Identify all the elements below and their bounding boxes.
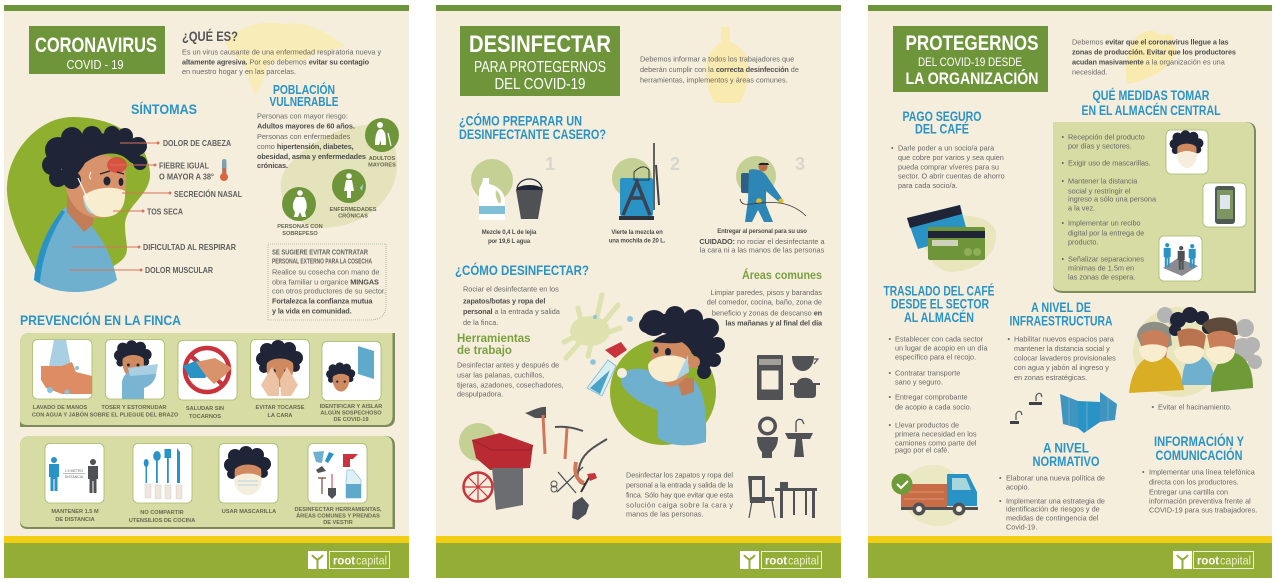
card: disinfect tools xyxy=(308,444,367,503)
label: enfermedades crónicas: CRÓNICAS xyxy=(338,212,368,220)
text: traslado list: pago por el café. xyxy=(895,446,949,454)
callout: harvest recommendation: MINGAS xyxy=(350,278,379,286)
heading: cómo desinfectar: ¿CÓMO DESINFECTAR? xyxy=(455,261,589,278)
icons: bathroom xyxy=(757,416,813,458)
illustration: tools xyxy=(459,407,607,520)
panel: desinfectar xyxy=(436,5,841,578)
heading: población vulnerable: POBLACIÓN xyxy=(273,82,335,97)
text: áreas comunes: las mañanas y al final del día xyxy=(725,318,823,328)
caption 3: Entregar al personal para su uso xyxy=(717,229,807,235)
caption 1: por 19,6 L agua xyxy=(488,239,531,245)
text: population at risk: hipertensión, diabetes, xyxy=(277,142,354,151)
heading: normativo: A NIVEL xyxy=(1043,440,1089,456)
heading line 2: DESDE EL SECTOR xyxy=(891,296,989,312)
logo: root capital: capital xyxy=(356,556,387,568)
label: mantener: MANTENER 1.5 M xyxy=(51,509,99,515)
heading: áreas comunes: Áreas comunes xyxy=(742,269,822,282)
text: qué es: altamente agresiva. xyxy=(182,58,248,66)
panel: protegernos xyxy=(868,5,1272,578)
text: traslado list: específico para el recojo. xyxy=(895,352,976,362)
heading: qué es: ¿QUÉ ES? xyxy=(182,28,238,44)
symptom labels: DOLOR DE CABEZA xyxy=(163,139,231,148)
panel: coronavirus xyxy=(4,5,409,578)
callout: harvest recommendation: y la vida en comunidad. xyxy=(272,306,352,316)
text: intro: zonas de producción. Evitar que los productores xyxy=(1072,48,1236,56)
text: normativo: • xyxy=(999,496,1002,506)
text: intro: correcta desinfección de xyxy=(716,65,799,74)
card: cough into elbow xyxy=(106,340,164,399)
logo: root capital: capital xyxy=(788,556,819,568)
text: traslado list: • xyxy=(888,368,892,378)
text: traslado list: un lugar de acopio en un día xyxy=(895,344,988,352)
text: traslado list: Entregar comprobante xyxy=(895,392,968,402)
text: herramientas: Desinfectar antes y después de xyxy=(457,360,559,370)
text: herramientas: tijeras, azadones, cosechadores, xyxy=(457,380,564,390)
text: traslado list: de acopio a cada socio. xyxy=(895,402,972,412)
caption 3: la cara ni a las manos de las personas xyxy=(700,246,825,254)
title box: DEL COVID-19 DESDE xyxy=(918,55,1022,69)
card: distance: DISTANCIA xyxy=(65,475,84,479)
text: intro: herramientas, implementos y áreas comunes. xyxy=(640,76,788,84)
text: pago seguro: sector. O abrir cuentas de ahorro xyxy=(898,172,1005,180)
text: información: Implementar una línea telefónica xyxy=(1149,468,1256,476)
text: measures list: • xyxy=(1062,132,1064,142)
text: infraestructura: en zonas estratégicas. xyxy=(1014,373,1087,382)
heading: herramientas: Herramientas xyxy=(457,333,531,345)
text: normativo: • xyxy=(999,474,1002,482)
callout: harvest recommendation xyxy=(268,244,386,320)
text: normativo: identificación de riesgos y de xyxy=(1006,504,1100,514)
label: identificar: DE COVID-19 xyxy=(333,417,369,423)
text: herramientas: despulpadora. xyxy=(457,390,503,398)
callout: harvest recommendation: con otros productores de su sector. xyxy=(272,286,386,296)
text: measures list: a la vez. xyxy=(1068,204,1095,212)
text: zapatos: personal a la entrada y salida de la xyxy=(626,480,734,490)
heading: infraestructura: A NIVEL DE xyxy=(1031,300,1091,315)
card: avoid touching face xyxy=(250,340,310,399)
symptom labels: DIFICULTAD AL RESPIRAR xyxy=(143,243,236,252)
text: pago seguro: que cobre por varios y sea quien xyxy=(898,153,1004,162)
caption 2: una mochila de 20 L. xyxy=(609,238,666,244)
caption 1: Mezcle 0,4 L de lejía xyxy=(482,230,537,236)
logo: root capital xyxy=(740,551,822,569)
footer xyxy=(868,536,1272,578)
text: qué es: en nuestro hogar y en las parcelas. xyxy=(182,67,296,76)
heading: medidas: QUÉ MEDIDAS TOMAR xyxy=(1092,88,1210,103)
label: saludar: TOCARNOS xyxy=(189,414,221,420)
text: rociar: zapatos/botas y ropa del xyxy=(463,296,545,306)
heading: prevención: PREVENCIÓN EN LA FINCA xyxy=(20,311,181,328)
spray bottle xyxy=(587,342,627,396)
text: measures list: social y restringir el xyxy=(1068,186,1131,196)
caption 3 xyxy=(699,229,826,254)
card: distance xyxy=(45,444,104,503)
heading line 2: NORMATIVO xyxy=(1032,454,1100,469)
heading line 2: EN EL ALMACÉN CENTRAL xyxy=(1082,103,1220,118)
text: intro: a la organización es una xyxy=(1144,58,1226,66)
title box: DEL COVID-19 xyxy=(494,76,586,93)
title box: LA ORGANIZACIÓN xyxy=(906,69,1038,88)
watermark: sprayer xyxy=(706,27,748,103)
footer xyxy=(4,536,409,578)
text: rociar: Rociar el desinfectante en los xyxy=(463,284,559,294)
caption 2: Vierte la mezcla en xyxy=(611,230,663,236)
label: toser: SOBRE EL PLIEGUE DEL BRAZO xyxy=(90,412,179,418)
text: información: • xyxy=(1142,468,1145,476)
text: traslado list: primera necesidad en los xyxy=(895,430,977,438)
prevention panel row 2 xyxy=(20,436,395,529)
illustration: truck xyxy=(892,465,978,526)
label: toser: TOSER Y ESTORNUDAR xyxy=(101,405,167,411)
text: population at risk: como xyxy=(257,142,277,151)
text: intro: Debemos xyxy=(1072,38,1105,46)
text: pago seguro: pueda comprar víveres para su xyxy=(898,162,999,172)
step 3 illustration xyxy=(736,156,806,222)
symptom labels: SECRECIÓN NASAL xyxy=(174,188,242,199)
illustration: washbasins and screens xyxy=(1010,392,1117,433)
text: traslado list: sano y seguro. xyxy=(895,378,943,386)
text: intro: necesidad. xyxy=(1072,68,1107,76)
text: traslado list: • xyxy=(888,392,892,402)
logo: root capital: root xyxy=(765,556,787,568)
text: intro: acudan masivamente xyxy=(1072,58,1144,66)
text: measures list: Recepción del producto xyxy=(1068,132,1145,142)
text: measures list: Mantener la distancia xyxy=(1068,176,1138,186)
text: zapatos: manos de las personas. xyxy=(626,510,703,518)
text: información: directa con los productores. xyxy=(1149,478,1239,486)
text: population at risk: Adultos mayores de 60 años. xyxy=(257,122,355,130)
label: lavado de manos: LAVADO DE MANOS xyxy=(33,405,88,411)
text: traslado list: camiones como parte del xyxy=(895,438,977,448)
symptom labels xyxy=(70,139,242,275)
text: información: COVID-19 para sus trabajadores. xyxy=(1149,506,1257,514)
illustration: person with symptoms xyxy=(7,117,150,292)
small droplets xyxy=(590,315,633,365)
card: distance: 1.5 METRO xyxy=(65,469,84,473)
text: rociar: personal xyxy=(463,307,493,316)
heading line 3: AL ALMACÉN xyxy=(904,309,974,325)
label: enfermedades crónicas: ENFERMEDADES xyxy=(330,207,377,213)
text: normativo: acopio. xyxy=(1006,482,1030,492)
label: identificar: ALGÚN SOSPECHOSO xyxy=(320,410,382,416)
watermark: heart xyxy=(1126,31,1176,84)
heading: traslado: TRASLADO DEL CAFÉ xyxy=(884,282,994,298)
text: traslado list: Establecer con cada sector xyxy=(895,334,984,344)
number 3: 3 xyxy=(795,154,805,174)
text: infraestructura: • xyxy=(1008,334,1010,344)
heading line 2: INFRAESTRUCTURA xyxy=(1010,314,1113,328)
world map watermark xyxy=(225,23,345,95)
label: desinfectar: ÁREAS COMUNES Y PRENDAS xyxy=(296,512,380,520)
text: measures list: por días y sectores. xyxy=(1068,142,1132,150)
symptom labels: FIEBRE IGUAL xyxy=(159,162,209,170)
text: intro: Debemos informar a todos los trabajadores que xyxy=(640,54,794,64)
title box xyxy=(29,26,165,74)
symptom labels: DOLOR MUSCULAR xyxy=(145,266,213,275)
text: qué es: Es un virus causante de una enfermedad respiratoria nueva y xyxy=(182,48,382,56)
text: measures list: • xyxy=(1062,254,1064,264)
label: evitar tocarse: EVITAR TOCARSE xyxy=(256,405,305,411)
callout: harvest recommendation: PERSONAL EXTERNO PARA LA COSECHA xyxy=(272,258,372,266)
title box xyxy=(893,26,1048,92)
icon: older adults xyxy=(365,118,399,152)
text: infraestructura: Habilitar nuevos espacios para xyxy=(1014,334,1115,344)
icon: chronic illness xyxy=(332,169,366,203)
text: infraestructura: con agua y jabón al ingreso y xyxy=(1014,363,1109,372)
footer xyxy=(436,536,841,578)
text: información: Entregar una cartilla con xyxy=(1149,488,1228,496)
heading: información: INFORMACIÓN Y xyxy=(1154,432,1245,449)
step 1 illustration xyxy=(471,159,543,220)
label: saludar: SALUDAR SIN xyxy=(186,406,224,412)
heading: herramientas: de trabajo xyxy=(457,345,512,357)
text: áreas comunes: Limpiar paredes, pisos y barandas xyxy=(710,288,822,297)
text: population at risk: obesidad, asma y enfermedades xyxy=(257,152,366,161)
illustration: person disinfecting xyxy=(587,306,725,445)
label: adultos mayores: MAYORES xyxy=(368,162,396,168)
panel: almacén central xyxy=(1053,122,1256,293)
card: no handshake xyxy=(178,340,237,400)
step 2 illustration xyxy=(612,143,659,220)
caption 3: CUIDADO: no rociar el desinfectante a xyxy=(699,237,825,246)
label: no compartir: NO COMPARTIR xyxy=(140,510,184,516)
text: measures list: Implementar un recibo xyxy=(1068,218,1141,228)
text: pago seguro: Darle poder a un socio/a para xyxy=(898,144,995,152)
text: normativo: Elaborar una nueva política de xyxy=(1006,474,1105,482)
heading: preparar desinfectante: ¿CÓMO PREPARAR UN xyxy=(459,112,582,128)
heading line 2: DESINFECTANTE CASERO? xyxy=(459,126,606,142)
text: infraestructura: colocar lavaderos provisionales xyxy=(1014,354,1116,362)
text: pago seguro: para cada socio/a. xyxy=(898,181,958,190)
text: population at risk: crónicas. xyxy=(257,161,288,170)
card: mask xyxy=(219,444,278,503)
illustration: cards xyxy=(907,205,996,272)
text: measures list: • xyxy=(1062,158,1064,168)
text: zapatos: Desinfectar los zapatos y ropa del xyxy=(626,470,733,480)
background blob: vulnerable xyxy=(281,125,397,228)
icons: furniture xyxy=(748,476,817,518)
text: normativo: medidas de contingencia del xyxy=(1006,514,1099,522)
illustration: group with masks xyxy=(1129,307,1262,397)
text: measures list: digital por la entrega de xyxy=(1068,228,1144,238)
title box xyxy=(460,26,620,96)
text: áreas comunes: del comedor, cocina, baño, zona de xyxy=(707,298,822,306)
icons: kitchen xyxy=(757,355,820,400)
heading: pago seguro: PAGO SEGURO xyxy=(902,109,982,124)
text: traslado list: • xyxy=(888,420,892,430)
text: normativo: Covid-19. xyxy=(1006,522,1037,532)
label: usar mascarilla: USAR MASCARILLA xyxy=(222,509,276,515)
heading line 2: VULNERABLE xyxy=(270,94,339,109)
label: personas con sobrepeso: SOBREPESO xyxy=(282,231,318,237)
label: adultos mayores: ADULTOS xyxy=(369,156,396,162)
text: herramientas: usar las palanas, cuchillos, xyxy=(457,370,544,380)
logo: root capital xyxy=(308,551,390,569)
logo: root capital: root xyxy=(333,556,355,568)
text: normativo: Implementar una estrategia de xyxy=(1006,496,1105,506)
text: qué es: Por eso debemos evitar su contagio xyxy=(249,58,369,66)
card: hand washing xyxy=(32,340,92,399)
text: zapatos: solución caiga sobre la cara y xyxy=(626,500,733,510)
heading line 2: COMUNICACIÓN xyxy=(1156,446,1242,463)
text: áreas comunes: beneficio y zonas de descanso en xyxy=(712,308,822,318)
text: zapatos: finca. Sólo hay que evitar que esta xyxy=(626,490,734,500)
heading: síntomas: SÍNTOMAS xyxy=(131,102,197,117)
text: evitar hacinamiento: • xyxy=(1152,402,1154,412)
text: intro: evitar que el coronavirus llegue a las xyxy=(1105,38,1229,46)
label: no compartir: UTENSILIOS DE COCINA xyxy=(129,518,195,524)
text: traslado list: Contratar transporte xyxy=(895,368,960,378)
text: measures list: ingreso a sólo una persona xyxy=(1068,194,1157,204)
label: evitar tocarse: LA CARA xyxy=(268,413,292,419)
text: intro: deberán cumplir con la xyxy=(640,65,716,74)
title box: PROTEGERNOS xyxy=(906,32,1038,55)
text: rociar: a la entrada y salida xyxy=(492,307,561,316)
card: isolate suspect xyxy=(322,342,381,400)
icon: overweight xyxy=(282,187,316,221)
label: personas con sobrepeso: PERSONAS CON xyxy=(277,224,323,230)
prevention panel row 1 xyxy=(20,333,395,427)
text: population at risk: Personas con mayor riesgo: xyxy=(257,112,348,120)
text: measures list: Exigir uso de mascarillas. xyxy=(1068,158,1151,168)
splash xyxy=(564,295,620,358)
callout: harvest recommendation: Realice su cosecha con mano de xyxy=(272,268,380,276)
logo: root capital: root xyxy=(1197,556,1219,568)
title box: PARA PROTEGERNOS xyxy=(474,59,606,76)
label: desinfectar: DE VESTIR xyxy=(323,520,353,526)
card: distancing xyxy=(1159,236,1202,281)
heading line 2: DEL CAFÉ xyxy=(915,122,969,136)
logo: root capital: capital xyxy=(1220,556,1251,568)
callout: harvest recommendation: obra familiar u organice xyxy=(272,278,350,286)
text: infraestructura: mantener la distancia social y xyxy=(1014,344,1110,353)
number 1: 1 xyxy=(545,154,555,174)
text: información: información preventiva frente al xyxy=(1149,496,1251,506)
callout: harvest recommendation: Fortalezca la confianza mutua xyxy=(272,296,373,306)
card: phone xyxy=(1203,183,1246,227)
text: measures list: • xyxy=(1062,218,1064,228)
title box: COVID - 19 xyxy=(66,58,124,72)
callout: harvest recommendation: SE SUGIERE EVITAR CONTRATAR xyxy=(272,250,368,256)
text: measures list: Señalizar separaciones xyxy=(1068,254,1144,264)
text: evitar hacinamiento: Evitar el hacinamiento. xyxy=(1158,402,1232,412)
title box: CORONAVIRUS xyxy=(35,34,157,57)
text: pago seguro: • xyxy=(891,144,894,152)
text: measures list: producto. xyxy=(1068,238,1098,246)
text: population at risk: Personas con enfermedades xyxy=(257,132,351,141)
text: rociar: de la finca. xyxy=(463,318,498,327)
text: traslado list: Llevar productos de xyxy=(895,420,959,430)
text: measures list: mínimas de 1.5m en xyxy=(1068,264,1134,272)
text: measures list: las zonas de espera. xyxy=(1068,272,1135,282)
label: mantener: DE DISTANCIA xyxy=(55,517,95,523)
text: traslado list: • xyxy=(888,334,892,344)
label: desinfectar: DESINFECTAR HERRAMIENTAS, xyxy=(294,507,382,513)
label: identificar: IDENTIFICAR Y AISLAR xyxy=(320,404,382,410)
icon: thermometer xyxy=(220,159,228,181)
card: utensils xyxy=(133,444,192,503)
label: lavado de manos: CON AGUA Y JABÓN xyxy=(32,410,88,418)
card: mask xyxy=(1166,130,1208,174)
symptom labels: TOS SECA xyxy=(147,208,183,216)
text: measures list: • xyxy=(1062,176,1064,186)
symptom labels: O MAYOR A 38° xyxy=(159,172,214,182)
title box: DESINFECTAR xyxy=(469,31,611,58)
number 2: 2 xyxy=(670,154,680,174)
logo: root capital xyxy=(1173,551,1254,569)
